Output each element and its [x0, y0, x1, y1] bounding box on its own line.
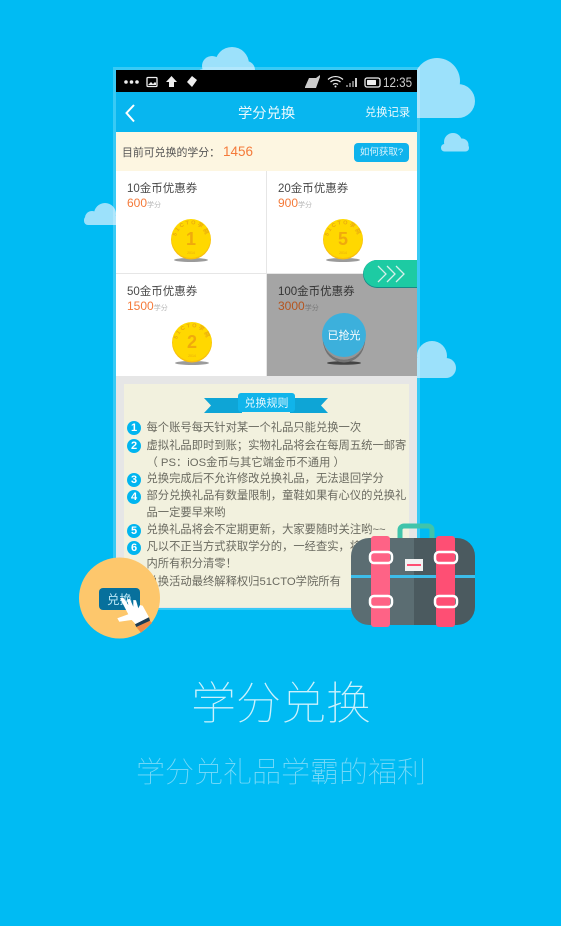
rule 2 [127, 439, 141, 453]
rule 3: 3 [131, 474, 137, 486]
cloud: left [84, 203, 124, 225]
coin 1 [171, 219, 211, 262]
icon: tap button badge [79, 558, 160, 638]
rule 5 [127, 524, 141, 538]
coin 5 [323, 219, 363, 262]
cloud: right large [410, 58, 475, 118]
header title: 学分兑换 [238, 106, 295, 122]
coin 1: 51CTO学院 [172, 220, 209, 236]
rules panel: （ PS：iOS金币与其它端金币不通用 ） [146, 457, 345, 469]
coin 5: 51CTO学院 [324, 220, 361, 236]
sold out stamp [322, 313, 366, 365]
coin 1: 1 [186, 229, 196, 249]
card 100 sold out: 100金币优惠券 [278, 286, 355, 298]
ribbon heading [204, 393, 328, 413]
rule 7: 兑换活动最终解释权归51CTO学院所有 [146, 576, 341, 588]
rules panel: 凡以不正当方式获取学分的，一经查实，将 [146, 541, 361, 553]
card 50: 50金币优惠券 [127, 286, 197, 298]
card 20: 900学分 [278, 196, 312, 210]
cloud: right lower [410, 341, 456, 378]
rules panel: 每个账号每天针对某一个礼品只能兑换一次 [146, 422, 361, 434]
rules panel: 虚拟礼品即时到账；实物礼品将会在每周五统一邮寄 [146, 440, 406, 452]
coin 5: 5 [338, 229, 348, 249]
card 20 [267, 171, 417, 273]
sold out stamp: 已抢光 [328, 328, 360, 342]
app header [116, 92, 417, 132]
card 10: 600学分 [127, 196, 161, 210]
how to get button [354, 143, 409, 162]
credits bar [116, 132, 417, 171]
cloud: top [197, 47, 255, 81]
how to get button: 如何获取? [360, 147, 403, 158]
status icons [124, 75, 381, 88]
rule 4: 4 [131, 491, 137, 503]
card 50 [116, 274, 266, 376]
credits value: 1456 [223, 144, 253, 159]
coin 5: 2014 [339, 251, 347, 255]
rules panel: 品一定要早来哟 [146, 507, 226, 519]
main title: 学分兑换 [191, 678, 371, 729]
cloud: right small [441, 133, 469, 152]
card 10: 10金币优惠券 [127, 183, 197, 195]
card 100 sold out: 3000学分 [278, 299, 319, 313]
swipe arrow tab [363, 260, 417, 288]
clock: 12:35 [383, 74, 412, 90]
ribbon heading: 兑换规则 [244, 396, 288, 410]
back arrow [125, 104, 135, 122]
rule 3 [127, 473, 141, 487]
coin 2 [172, 322, 212, 365]
background clouds [84, 47, 475, 378]
coin 2: 2 [187, 332, 197, 352]
card 50: 1500学分 [127, 299, 168, 313]
card 10 [116, 171, 266, 273]
rule 5: 5 [131, 525, 137, 537]
coin 1: 2014 [187, 251, 195, 255]
rule 4 [127, 490, 141, 504]
phone screen [113, 67, 420, 610]
rule 6 [127, 541, 141, 555]
rule 1: 1 [131, 422, 137, 434]
header link: 兑换记录 [365, 107, 410, 119]
icon: suitcase [351, 524, 475, 627]
coin 2: 51CTO学院 [174, 324, 210, 339]
rules panel: 内所有积分清零！ [146, 558, 237, 570]
rules panel: 兑换完成后不允许修改兑换礼品，无法退回学分 [146, 473, 384, 485]
rule 1 [127, 421, 141, 435]
rules panel [124, 384, 409, 607]
rule 6: 6 [131, 542, 137, 554]
subtitle: 学分兑礼品学霸的福利 [136, 757, 426, 789]
status bar [116, 70, 417, 92]
credits label: 目前可兑换的学分： [122, 147, 220, 159]
card 20: 20金币优惠券 [278, 183, 348, 195]
coupon grid [116, 171, 417, 376]
rules panel: 部分兑换礼品有数量限制，童鞋如果有心仪的兑换礼 [146, 490, 406, 502]
card 100 sold out [267, 274, 417, 376]
coin 2: 2014 [188, 354, 196, 358]
rule 2: 2 [131, 440, 137, 452]
rules panel: 兑换礼品将会不定期更新，大家要随时关注哟~~ [146, 524, 386, 536]
screen body [116, 70, 417, 608]
icon: tap button badge: 兑换 [107, 593, 133, 607]
